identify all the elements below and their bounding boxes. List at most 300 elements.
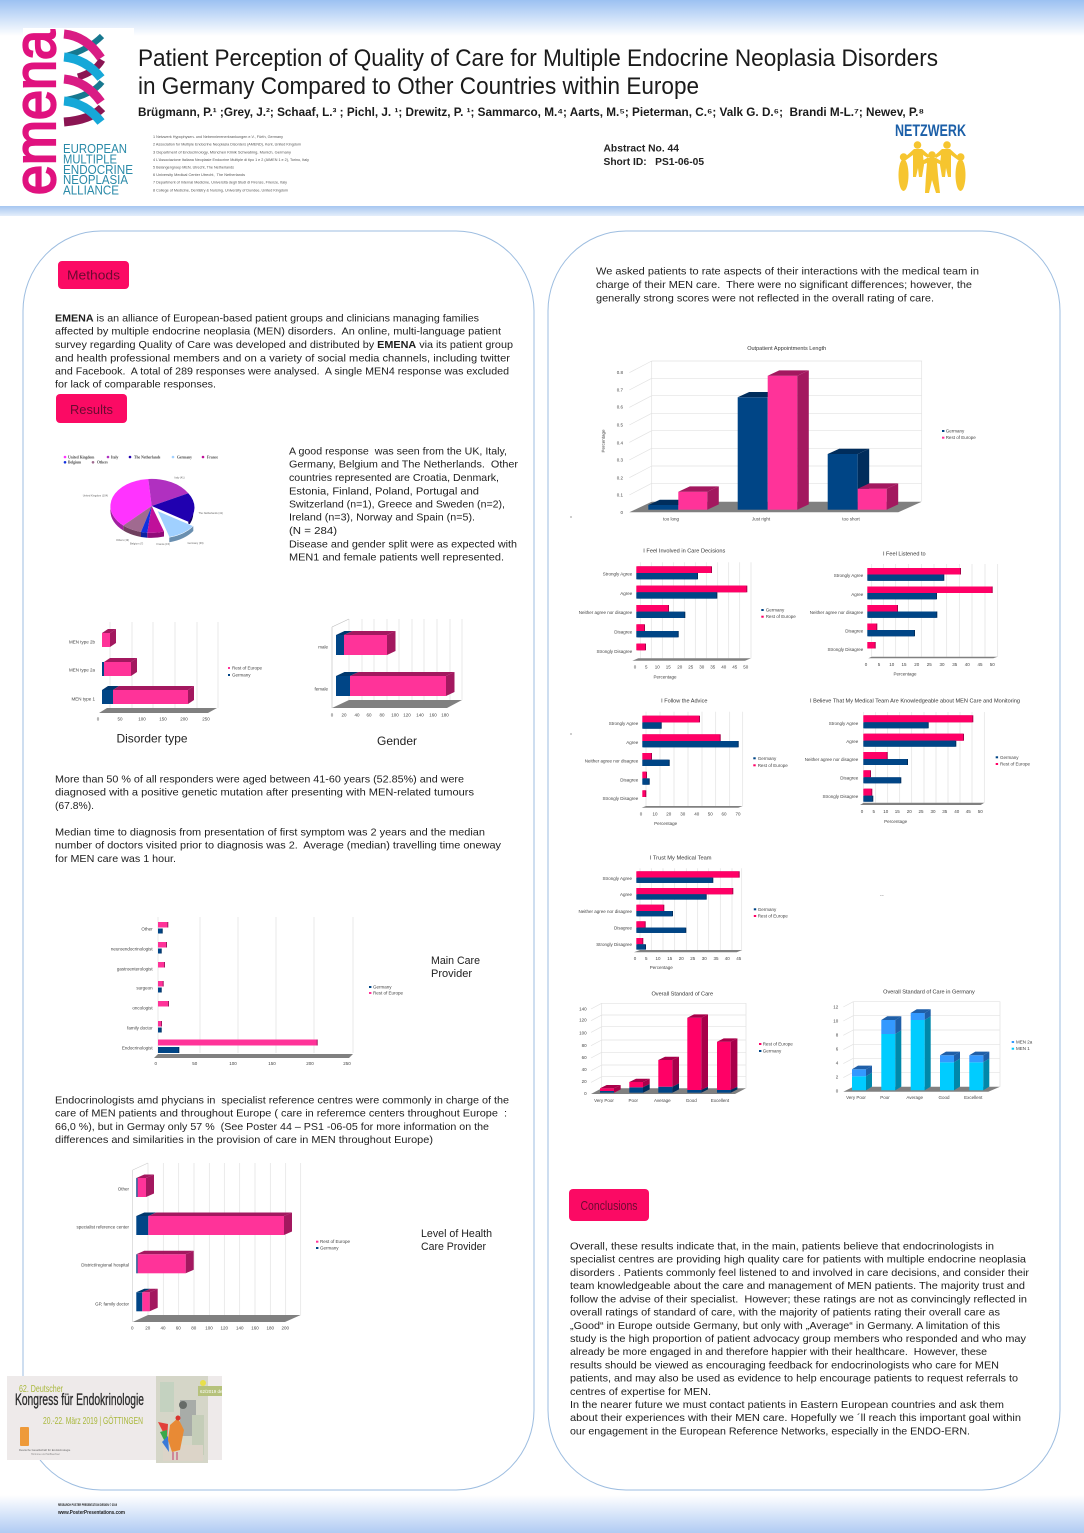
footer gradient band (0, 1495, 1084, 1533)
bar chart: outpatient appointments length: too long (663, 516, 680, 522)
text: methods: survey regarding Quality of Care was developed and distributed by EMENA via its patient group (55, 339, 513, 351)
text: methods (55, 312, 513, 391)
text: response summary (289, 446, 519, 564)
bar chart: outpatient appointments length: 0.3 (617, 458, 623, 462)
image: congress banner: Deutsche Gesellschaft für Endokrinologie (19, 1448, 71, 1452)
bar chart: knowledgeable medical team: 30 (930, 809, 936, 814)
bar chart: outpatient appointments length: 0.7 (617, 388, 623, 392)
bar chart: knowledgeable medical team: Disagree (840, 776, 859, 780)
bar chart: gender (314, 619, 462, 718)
bar chart: main care provider: 50 (192, 1061, 198, 1066)
bar chart: level of health care provider: 20 (145, 1326, 151, 1330)
heading: Results (56, 394, 127, 423)
bar chart: overall standard of care in Germany: 12 (833, 1004, 839, 1010)
bar chart: involved in care decisions: Rest of Europe (766, 614, 796, 619)
text: conclusions: disorders . Patients commonly feel listened to and involved in care decisions, and consider their (570, 1267, 1030, 1279)
bar chart: involved in care decisions: Neither agree nor disagree (579, 610, 633, 615)
bar chart: knowledgeable medical team: 20 (907, 809, 912, 814)
logo: EMENA: ALLIANCE (63, 182, 119, 198)
text: specialist centres (55, 1094, 509, 1146)
bar chart: knowledgeable medical team: 15 (895, 809, 900, 814)
bar chart: gender: 100 (391, 712, 399, 718)
bar chart: involved in care decisions: 20 (677, 664, 683, 670)
text: conclusions: study is the high proportion of patient advocacy group members who responded and who may (570, 1333, 1027, 1345)
bar chart: follow the advice: 20 (666, 812, 672, 816)
stray mark beside follow-the-advice chart (570, 733, 572, 735)
bar chart: disorder type: Rest of Europe (232, 666, 263, 670)
bar chart: knowledgeable medical team: Germany (1000, 755, 1019, 760)
bar chart: feel listened to: Strongly Agree (834, 573, 864, 578)
bar chart: feel listened to: 30 (939, 662, 945, 667)
logo: Netzwerk (895, 121, 967, 193)
bar chart: gender: 160 (429, 712, 437, 718)
bar chart: follow the advice: 50 (708, 812, 713, 816)
title: Patient Perception of Quality of Care for Multiple Endocrine Neoplasia Disorders (138, 45, 938, 72)
pie chart: responses by country (64, 455, 223, 546)
bar chart: outpatient appointments length: Germany (946, 428, 965, 434)
label: main care provider (431, 955, 480, 980)
bar chart: overall standard of care in Germany: 6 (836, 1046, 839, 1052)
bar chart: disorder type: 100 (138, 716, 146, 722)
bar chart: involved in care decisions: 45 (732, 664, 738, 670)
bar chart: main care provider: 250 (343, 1061, 351, 1066)
text: methods: and Facebook. A total of 289 responses were analysed. A single MEN4 response was excluded (55, 366, 509, 378)
bar chart: gender: 80 (379, 712, 385, 718)
bar chart: knowledgeable medical team: 10 (883, 809, 889, 814)
bar chart: overall standard of care in Germany: 10 (833, 1018, 839, 1024)
bar chart: knowledgeable medical team: Agree (846, 739, 859, 744)
bar chart: feel listened to: 10 (889, 662, 895, 667)
logo: EMENA (3, 28, 134, 198)
bar chart: feel listened to: 5 (878, 662, 881, 667)
stray mark beside outpatient chart (570, 516, 572, 518)
pie chart: responses by country: Germany (39) (188, 541, 204, 545)
text: conclusions: our engagement in the European Reference Networks, especially in the ENDO-ERN. (570, 1425, 970, 1437)
bar chart: feel listened to: 20 (914, 662, 920, 667)
bar chart: knowledgeable medical team: 0 (861, 809, 864, 814)
bar chart: trust my medical team: 10 (655, 956, 661, 961)
bar chart: level of health care provider: Germany (320, 1246, 339, 1250)
bar chart: level of health care provider: 0 (131, 1326, 134, 1330)
bar chart: overall standard of care in Germany: 2 (836, 1074, 839, 1080)
bar chart: feel listened to: 0 (865, 662, 868, 667)
bar chart: gender: 60 (366, 712, 372, 718)
bar chart: involved in care decisions: I Feel Involved in Care Decisions (643, 549, 725, 555)
bar chart: overall standard of care: Germany (763, 1048, 782, 1054)
text: demographics (55, 774, 502, 865)
bar chart: overall standard of care in Germany: 0 (836, 1088, 839, 1094)
bar chart: follow the advice: Strongly Disagree (603, 796, 639, 801)
right intro text: generally strong scores were not reflected in the overall rating of care. (596, 292, 934, 304)
bar chart: follow the advice: Germany (758, 756, 777, 761)
bar chart: outpatient appointments length (601, 346, 976, 522)
affiliations: 5 Belangengroep MEN, Utrecht, The Netherlands (153, 165, 234, 170)
pie chart: responses by country: Germany (177, 455, 192, 459)
pie chart: responses by country: United Kingdom (68, 455, 95, 459)
text: demographics: Median time to diagnosis from presentation of first symptom was 2 years and the median (55, 826, 485, 838)
bar chart: gender: male (318, 644, 328, 650)
bar chart: main care provider: Endocrinologist (122, 1046, 153, 1050)
bar chart: trust my medical team: 25 (690, 956, 696, 961)
text: response summary: countries represented are Croatia, Denmark, (289, 472, 499, 484)
bar chart: outpatient appointments length: 0.1 (617, 492, 623, 498)
bar chart: main care provider: Other (141, 926, 153, 932)
bar chart: disorder type: 250 (202, 716, 210, 722)
bar chart: knowledgeable medical team: 5 (872, 809, 875, 814)
bar chart: involved in care decisions: 10 (655, 664, 660, 670)
bar chart: knowledgeable medical team: 45 (966, 809, 971, 814)
bar chart: trust my medical team: Germany (758, 907, 777, 912)
text: conclusions: „Good“ in Europe outside Germany, but only with „Average“ in Germany. A limitation of this (570, 1320, 1000, 1332)
bar chart: outpatient appointments length: 0 (620, 510, 623, 515)
authors: Brügmann, P.¹ ;Grey, J.²; Schaaf, L.³ ; Pichl, J. ¹; Drewitz, P. ¹; Sammarco, M.⁴; Aarts, M.⁵; Pieterman, C.⁶; Valk G. D.⁶; Brandi M-L.⁷; Newev, P.⁸ (138, 107, 924, 119)
bar chart: knowledgeable medical team: Percentage (884, 819, 908, 824)
bar chart: trust my medical team: Percentage (650, 965, 673, 970)
affiliations: 1 Netzwerk Hypophysen- und Nebennierenerkrankungen e.V., Fürth, Germany (153, 134, 283, 139)
text: response summary: Switzerland (n=1), Greece and Sweden (n=2), (289, 498, 505, 510)
bar chart: overall standard of care in Germany: 8 (836, 1032, 839, 1038)
bar chart: knowledgeable medical team (805, 699, 1031, 824)
bar chart: level of health care provider: 40 (160, 1326, 166, 1330)
heading: Conclusions (569, 1189, 649, 1221)
text: conclusions: follow the advise of their specialist. However; these ratings are not as convincingly reflected in (570, 1293, 1027, 1305)
bar chart: overall standard of care: Average (654, 1098, 671, 1103)
heading: Methods: Methods (67, 268, 120, 282)
bar chart: feel listened to: 40 (965, 662, 970, 667)
bar chart: gender: 40 (354, 712, 360, 718)
image: congress banner: Kongress für Endokrinologie (15, 1390, 144, 1409)
bar chart: main care provider: 150 (268, 1061, 276, 1066)
panel: right column (548, 231, 1060, 1490)
image: congress banner: Hormone und Stoffwechsel (31, 1453, 60, 1456)
bar chart: level of health care provider: Rest of Europe (320, 1239, 351, 1244)
bar chart: knowledgeable medical team: Rest of Europe (1000, 762, 1031, 766)
heading: Results: Results (70, 403, 113, 417)
caption: gender: Gender (377, 734, 417, 748)
label: main care provider: Provider (431, 968, 472, 980)
text: conclusions: Overall, these results indicate that, in the main, patients believe that endocrinologists in (570, 1240, 994, 1252)
bar chart: level of health care provider: 60 (176, 1326, 181, 1330)
bar chart: outpatient appointments length: 0.2 (617, 475, 623, 480)
affiliations: 7 Department of Internal Medicine, Università degli Studi di Firenze, Firenze, Italy (153, 180, 287, 185)
text: response summary: Germany, Belgium and The Netherlands. Other (289, 459, 519, 471)
bar chart: disorder type: 150 (159, 716, 167, 722)
text: conclusions: patients, and may also be used as evidence to help encourage patients to request referrals to (570, 1373, 1018, 1385)
text: demographics: More than 50 % of all responders were aged between 41-60 years (52.85%) and were (55, 774, 464, 786)
bar chart: follow the advice: Agree (626, 740, 639, 745)
bar chart: follow the advice: Disagree (620, 778, 639, 782)
bar chart: feel listened to: Disagree (845, 628, 864, 634)
bar chart: overall standard of care in Germany: Very Poor (846, 1095, 866, 1100)
bar chart: level of health care provider: 120 (221, 1326, 229, 1330)
bar chart: overall standard of care (579, 991, 793, 1103)
bar chart: follow the advice: Percentage (654, 821, 678, 826)
right intro text: charge of their MEN care. There were no significant differences; however, the (596, 279, 972, 291)
affiliations: 3 Department of Endocrinology, München Klinik Schwabing, Munich, Germany (153, 149, 291, 154)
logo: Netzwerk: NETZWERK (895, 121, 967, 140)
bar chart: trust my medical team: 20 (679, 956, 684, 961)
text: methods: and health professional members and on a variety of social media channels, including twitter (55, 352, 511, 364)
bar chart: trust my medical team: 40 (725, 956, 730, 961)
pie chart: responses by country: The Netherlands (41) (198, 511, 223, 515)
pie chart: responses by country: Others (19) (116, 538, 129, 542)
bar chart: overall standard of care: Excellent (711, 1098, 730, 1103)
bar chart: knowledgeable medical team: Strongly Disagree (823, 794, 859, 799)
bar chart: main care provider: 200 (306, 1061, 314, 1066)
text: conclusions: already be more engaged in and therefore happier with their healthcare. However, these (570, 1346, 987, 1358)
text: methods: EMENA is an alliance of European-based patient groups and clinicians managing families (55, 312, 479, 324)
bar chart: outpatient appointments length: 0.5 (617, 422, 623, 428)
bar chart: involved in care decisions: 15 (666, 664, 671, 670)
logo: EMENA: NEOPLASIA (63, 172, 128, 187)
heading: Conclusions: Conclusions (580, 1199, 638, 1213)
text: demographics: diagnosed with a positive genetic mutation after presenting with MEN-related tumours (55, 787, 474, 799)
bar chart: knowledgeable medical team: Strongly Agree (829, 721, 859, 726)
footer credit: www.PosterPresentations.com (57, 1510, 125, 1516)
text: conclusions: In the nearer future we must contact patients in Eastern European countries and ask them (570, 1399, 1004, 1411)
pie chart: responses by country: Belgium (7) (130, 542, 143, 546)
bar chart: overall standard of care in Germany: Good (938, 1095, 950, 1100)
bar chart: follow the advice: Neither agree nor disagree (585, 758, 639, 764)
heading: Methods (58, 261, 129, 289)
text: methods: for lack of comparable responses. (55, 379, 216, 391)
logo: EMENA: EUROPEAN (63, 141, 127, 156)
bar chart: gender: 120 (403, 712, 411, 718)
bar chart: disorder type: 0 (97, 716, 100, 722)
bar chart: feel listened to: Agree (851, 592, 864, 597)
pie chart: responses by country: Italy (41) (174, 476, 185, 480)
bar chart: involved in care decisions: Disagree (614, 630, 633, 634)
bar chart: feel listened to: I Feel Listened to (883, 551, 926, 557)
caption: disorder type: Disorder type (116, 732, 188, 746)
bar chart: knowledgeable medical team: 40 (954, 809, 960, 814)
bar chart: main care provider: Germany (373, 984, 392, 990)
label: level of health care provider (421, 1228, 492, 1253)
right intro text: We asked patients to rate aspects of their interactions with the medical team in (596, 266, 979, 278)
text: conclusions: specialist centres are providing high quality care for patients with multiple endocrine neoplasia (570, 1254, 1026, 1266)
bar chart: overall standard of care: Rest of Europe (763, 1042, 793, 1046)
bar chart: follow the advice: 40 (694, 812, 700, 816)
bar chart: knowledgeable medical team: 35 (942, 809, 948, 814)
bar chart: disorder type: MEN type 1 (71, 696, 95, 702)
text: response summary: Ireland (n=3), Norway and Spain (n=5). (289, 512, 475, 524)
bar chart: trust my medical team: 5 (645, 956, 648, 961)
image: congress banner (7, 1376, 223, 1463)
pie chart: responses by country: France (207, 455, 218, 459)
text: response summary: (N = 284) (289, 525, 337, 537)
bar chart: feel listened to: 35 (952, 662, 958, 667)
bar chart: level of health care provider: 160 (251, 1326, 259, 1330)
bar chart: overall standard of care: Poor (629, 1098, 639, 1103)
bar chart: involved in care decisions: 35 (710, 664, 716, 670)
affiliations: 8 College of Medicine, Dentistry & Nursing, University of Dundee, United Kingdom (153, 187, 288, 192)
bar chart: follow the advice: Rest of Europe (758, 763, 788, 768)
footer credit (57, 1503, 125, 1516)
bar chart: trust my medical team: Disagree (614, 926, 632, 930)
text: conclusions: centres of expertise for MEN. (570, 1386, 711, 1398)
panel: left column (23, 231, 534, 1490)
bar chart: overall standard of care in Germany (833, 989, 1033, 1100)
bar chart: level of health care provider: District/regional hospital (81, 1262, 129, 1268)
bar chart: outpatient appointments length: 0.6 (617, 404, 623, 409)
bar chart: level of health care provider: 80 (191, 1326, 197, 1330)
header lower band (0, 206, 1084, 216)
bar chart: overall standard of care in Germany: Poor (880, 1095, 890, 1100)
bar chart: overall standard of care: 40 (582, 1067, 587, 1072)
bar chart: disorder type: Germany (232, 672, 251, 678)
bar chart: involved in care decisions: 40 (721, 664, 727, 670)
bar chart: level of health care provider: 140 (236, 1326, 244, 1330)
bar chart: feel listened to: Percentage (893, 672, 917, 676)
bar chart: trust my medical team: 30 (702, 956, 707, 961)
logo: EMENA: ENDOCRINE (63, 162, 133, 177)
pie chart: responses by country: The Netherlands (134, 455, 161, 459)
bar chart: disorder type: 50 (117, 716, 123, 722)
bar chart: main care provider: 100 (229, 1061, 237, 1066)
abstract number (604, 142, 704, 168)
bar chart: involved in care decisions: 50 (743, 664, 749, 670)
bar chart: trust my medical team (578, 855, 788, 970)
title (138, 45, 938, 100)
bar chart: knowledgeable medical team: Neither agree nor disagree (805, 757, 859, 762)
bar chart: main care provider (111, 917, 404, 1066)
bar chart: disorder type: 200 (180, 716, 188, 722)
bar chart: knowledgeable medical team: 25 (918, 809, 924, 814)
text: specialist centres: Endocrinologists amd phycians in specialist reference centres were commonly in charge of the (55, 1094, 509, 1106)
bar chart: main care provider: surgeon (136, 986, 153, 990)
bar chart: involved in care decisions: 30 (699, 664, 705, 670)
bar chart: trust my medical team: Strongly Disagree (596, 942, 632, 947)
bar chart: trust my medical team: I Trust My Medical Team (650, 855, 712, 861)
bar chart: main care provider: oncologist (132, 1006, 153, 1010)
text: demographics: for MEN care was 1 hour. (55, 853, 176, 865)
image: congress banner: 20.-22. März 2019 | GÖTTINGEN (43, 1415, 143, 1427)
bar chart: main care provider: neuroendocrinologist (111, 946, 153, 952)
bar chart: follow the advice: 70 (735, 812, 741, 816)
bar chart: gender: 140 (416, 712, 424, 718)
bar chart: involved in care decisions: Strongly Disagree (597, 649, 633, 654)
bar chart: overall standard of care in Germany: Average (906, 1095, 924, 1100)
pie chart: responses by country: France (15) (156, 542, 170, 546)
pie chart: responses by country: United Kingdom (104) (83, 494, 108, 498)
text: conclusions: team knowledgeable about the care and management of MEN patients. The majority trust and (570, 1280, 1025, 1292)
bar chart: feel listened to: 45 (977, 662, 983, 667)
bar chart: feel listened to: 50 (990, 662, 995, 667)
bar chart: level of health care provider (76, 1163, 351, 1330)
bar chart: trust my medical team: Neither agree nor disagree (578, 909, 632, 914)
bar chart: overall standard of care: Very Poor (594, 1098, 614, 1103)
bar chart: level of health care provider: GP, family doctor (95, 1302, 129, 1306)
bar chart: outpatient appointments length: Percentage (601, 429, 606, 453)
text: response summary: Estonia, Finland, Poland, Portugal and (289, 485, 479, 497)
pie chart: responses by country: Others (97, 461, 108, 465)
bar chart: follow the advice: 0 (640, 812, 643, 816)
header gradient band (0, 0, 1084, 36)
bar chart: level of health care provider: 180 (267, 1326, 275, 1330)
text: conclusions: about their experiences with their MEN care. Hopefully we ´ll reach this important goal within (570, 1412, 1021, 1424)
bar chart: trust my medical team: 45 (736, 956, 742, 961)
bar chart: trust my medical team: 15 (667, 956, 673, 961)
text: response summary: A good response was seen from the UK, Italy, (289, 446, 507, 458)
bar chart: disorder type: MEN type 2a (69, 668, 95, 672)
image: congress banner: 62/2019 de (200, 1389, 223, 1394)
bar chart: level of health care provider: 100 (205, 1326, 213, 1330)
bar chart: involved in care decisions (579, 549, 796, 679)
bar chart: overall standard of care: 20 (582, 1079, 587, 1084)
bar chart: overall standard of care: Good (686, 1098, 697, 1103)
bar chart: overall standard of care in Germany: MEN 1 (1016, 1046, 1030, 1051)
bar chart: overall standard of care in Germany: MEN 2a (1016, 1040, 1033, 1044)
bar chart: gender: 180 (441, 712, 449, 718)
bar chart: involved in care decisions: 25 (688, 664, 694, 670)
bar chart: overall standard of care: 100 (579, 1030, 587, 1036)
text: specialist centres: care of MEN patients and throughout Europe ( care in referemce centers throughout Europe : (55, 1108, 507, 1120)
bar chart: level of health care provider: specialist reference center (76, 1224, 129, 1230)
bar chart: disorder type: MEN type 2b (69, 640, 95, 644)
bar chart: outpatient appointments length: too short (842, 516, 861, 522)
abstract number: Short ID: PS1-06-05 (604, 156, 704, 168)
text: specialist centres: differences and similarities in the provision of care in MEN throughout Europe) (55, 1134, 433, 1146)
bar chart: trust my medical team: 0 (634, 956, 637, 961)
text: methods: affected by multiple endocrine neoplasia (MEN) disorders. An online, multi-language patient (55, 326, 501, 338)
bar chart: involved in care decisions: Percentage (653, 674, 677, 679)
affiliations (153, 134, 309, 192)
bar chart: overall standard of care in Germany: Excellent (964, 1095, 983, 1100)
text: specialist centres: 66,0 %), but in Germay only 57 % (See Poster 44 – PS1 -06-05 for more information on the (55, 1121, 489, 1133)
bar chart: involved in care decisions: Agree (620, 591, 633, 596)
bar chart: follow the advice: 60 (721, 812, 727, 816)
bar chart: knowledgeable medical team: I Believe That My Medical Team Are Knowledgeable about MEN Care and Monitoring (810, 699, 1020, 705)
label: main care provider: Main Care (431, 955, 480, 967)
bar chart: gender: 20 (341, 712, 347, 718)
bar chart: overall standard of care: 120 (579, 1018, 587, 1022)
bar chart: feel listened to (810, 551, 998, 676)
bar chart: feel listened to: 25 (927, 662, 932, 667)
footer credit: RESEARCH POSTER PRESENTATION DESIGN © 2019 (58, 1503, 117, 1507)
bar chart: outpatient appointments length: 0.8 (617, 370, 623, 375)
bar chart: overall standard of care: 0 (584, 1091, 587, 1096)
bar chart: main care provider: 0 (154, 1061, 157, 1066)
bar chart: overall standard of care: 60 (582, 1055, 587, 1060)
bar chart: outpatient appointments length: Rest of Europe (946, 435, 976, 440)
bar chart: outpatient appointments length: 0.4 (617, 440, 623, 445)
abstract number: Abstract No. 44 (604, 142, 679, 154)
bar chart: overall standard of care: Overall Standard of Care (651, 991, 713, 997)
bar chart: trust my medical team: Rest of Europe (758, 914, 788, 918)
bar chart: involved in care decisions: 5 (645, 664, 648, 670)
text: conclusions: overall ratings of standard of care, with the majority of patients rating their overall care as (570, 1307, 1000, 1319)
bar chart: gender: 0 (331, 712, 334, 718)
bar chart: main care provider: gastroenterologist (117, 966, 153, 972)
logo: EMENA: MULTIPLE (63, 152, 117, 166)
text: conclusions: results should be viewed as encouraging feedback for endocrinologists who care for MEN (570, 1359, 999, 1371)
stray marks beside trust chart (880, 894, 883, 896)
bar chart: follow the advice: I Follow the Advice (661, 699, 707, 705)
bar chart: outpatient appointments length: Outpatient Appointments Length (747, 346, 826, 352)
bar chart: involved in care decisions: 0 (634, 664, 637, 670)
bar chart: feel listened to: 15 (901, 662, 907, 667)
text: demographics: number of doctors visited prior to diagnosis was 2. Average (median) travelling time oneway (55, 840, 502, 852)
bar chart: feel listened to: Strongly Disagree (828, 647, 864, 652)
bar chart: involved in care decisions: Strongly Agree (603, 572, 633, 576)
bar chart: trust my medical team: Agree (620, 892, 632, 897)
bar chart: overall standard of care in Germany: Overall Standard of Care in Germany (883, 989, 975, 995)
label: level of health care provider: Care Provider (421, 1241, 486, 1253)
text: conclusions (570, 1240, 1030, 1437)
bar chart: level of health care provider: Other (118, 1186, 129, 1192)
bar chart: trust my medical team: Strongly Agree (602, 876, 632, 881)
affiliations: 2 Association for Multiple Endocrine Neoplasia Disorders (AMEND), Kent, United Kingdom (153, 142, 301, 147)
